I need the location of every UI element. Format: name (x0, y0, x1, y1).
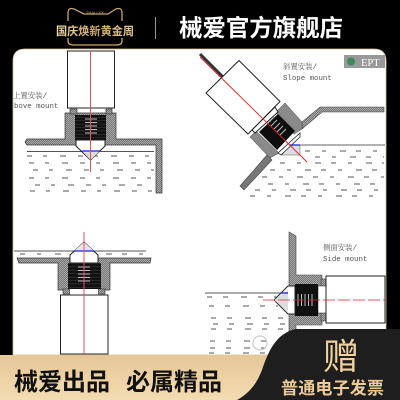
gray cone fill (282, 145, 300, 155)
logo: Tmall holiday badge: THALLXX (86, 10, 104, 15)
gap (70, 288, 98, 295)
axis (83, 232, 85, 355)
logo: Tmall holiday badge (56, 8, 134, 45)
EPT logo: EPT (361, 58, 380, 69)
thread highlights (298, 294, 312, 306)
store title: 械爱官方旗舰店 (179, 14, 343, 41)
sensor body (326, 276, 385, 323)
blue level line (290, 144, 300, 146)
collar (252, 107, 278, 133)
cone (274, 286, 295, 314)
housing lower (250, 131, 279, 158)
housing upper (276, 103, 302, 134)
label (283, 62, 332, 83)
water surface (205, 292, 288, 294)
gray cone fill (82, 151, 100, 160)
label: 斜置安装/ (283, 62, 318, 72)
blue level line (82, 150, 100, 152)
lower plate (240, 155, 272, 190)
axis (263, 299, 385, 301)
diagram: side mount (205, 232, 385, 353)
water surface (14, 250, 146, 252)
upper plate (302, 107, 384, 129)
water dashes (27, 156, 154, 191)
cone (76, 140, 105, 160)
sensor body (60, 295, 108, 354)
panel: white diagram area (13, 49, 386, 355)
water dashes (20, 253, 145, 255)
panel: gift badge (237, 329, 400, 400)
nuts (63, 289, 105, 294)
thread (295, 284, 318, 316)
blue level line (281, 292, 288, 294)
mounting plate (25, 113, 162, 193)
thread highlights (78, 267, 90, 281)
sensor body (68, 51, 114, 108)
thread highlights (85, 119, 97, 133)
water dashes (250, 151, 384, 196)
cone (70, 242, 98, 263)
label: Slope mount (283, 75, 332, 83)
water dashes (207, 297, 288, 353)
water surface (27, 150, 154, 152)
gray cone fill (74, 242, 94, 251)
diagram: above mount (13, 50, 162, 193)
gray cone fill (274, 290, 288, 312)
label (323, 243, 367, 264)
plate and housing (289, 232, 322, 335)
slogan: 械爱出品 (14, 369, 110, 396)
watermark (253, 336, 267, 350)
nuts (321, 279, 326, 321)
EPT logo (344, 55, 385, 69)
cone strip (278, 133, 300, 155)
slogan second part: 必属精品 (126, 369, 222, 396)
logo: Tmall holiday badge: 国庆焕新黄金周 (56, 24, 134, 38)
nuts (70, 109, 112, 114)
axis (200, 57, 307, 162)
label (13, 91, 58, 111)
label: bove mount (14, 103, 58, 111)
diagram: slope mount (200, 54, 385, 196)
divider (155, 17, 156, 39)
thread (259, 114, 295, 150)
water surface (300, 144, 385, 146)
thread (75, 115, 106, 140)
plate and housing (17, 258, 151, 290)
label: Side mount (323, 256, 367, 264)
axis (90, 50, 92, 172)
thread highlights (268, 117, 286, 135)
sensor body (206, 60, 280, 134)
thread (68, 263, 101, 289)
invoice text: 普通电子发票 (281, 378, 384, 398)
bottom banner (0, 355, 400, 400)
blue level line (74, 250, 94, 252)
wire (200, 54, 223, 77)
label: 侧面安装/ (323, 243, 358, 253)
gap (318, 286, 326, 313)
label: 上置安装/ (13, 91, 48, 101)
diagram: below mount (14, 232, 151, 355)
gift character: 赠 (323, 336, 359, 377)
